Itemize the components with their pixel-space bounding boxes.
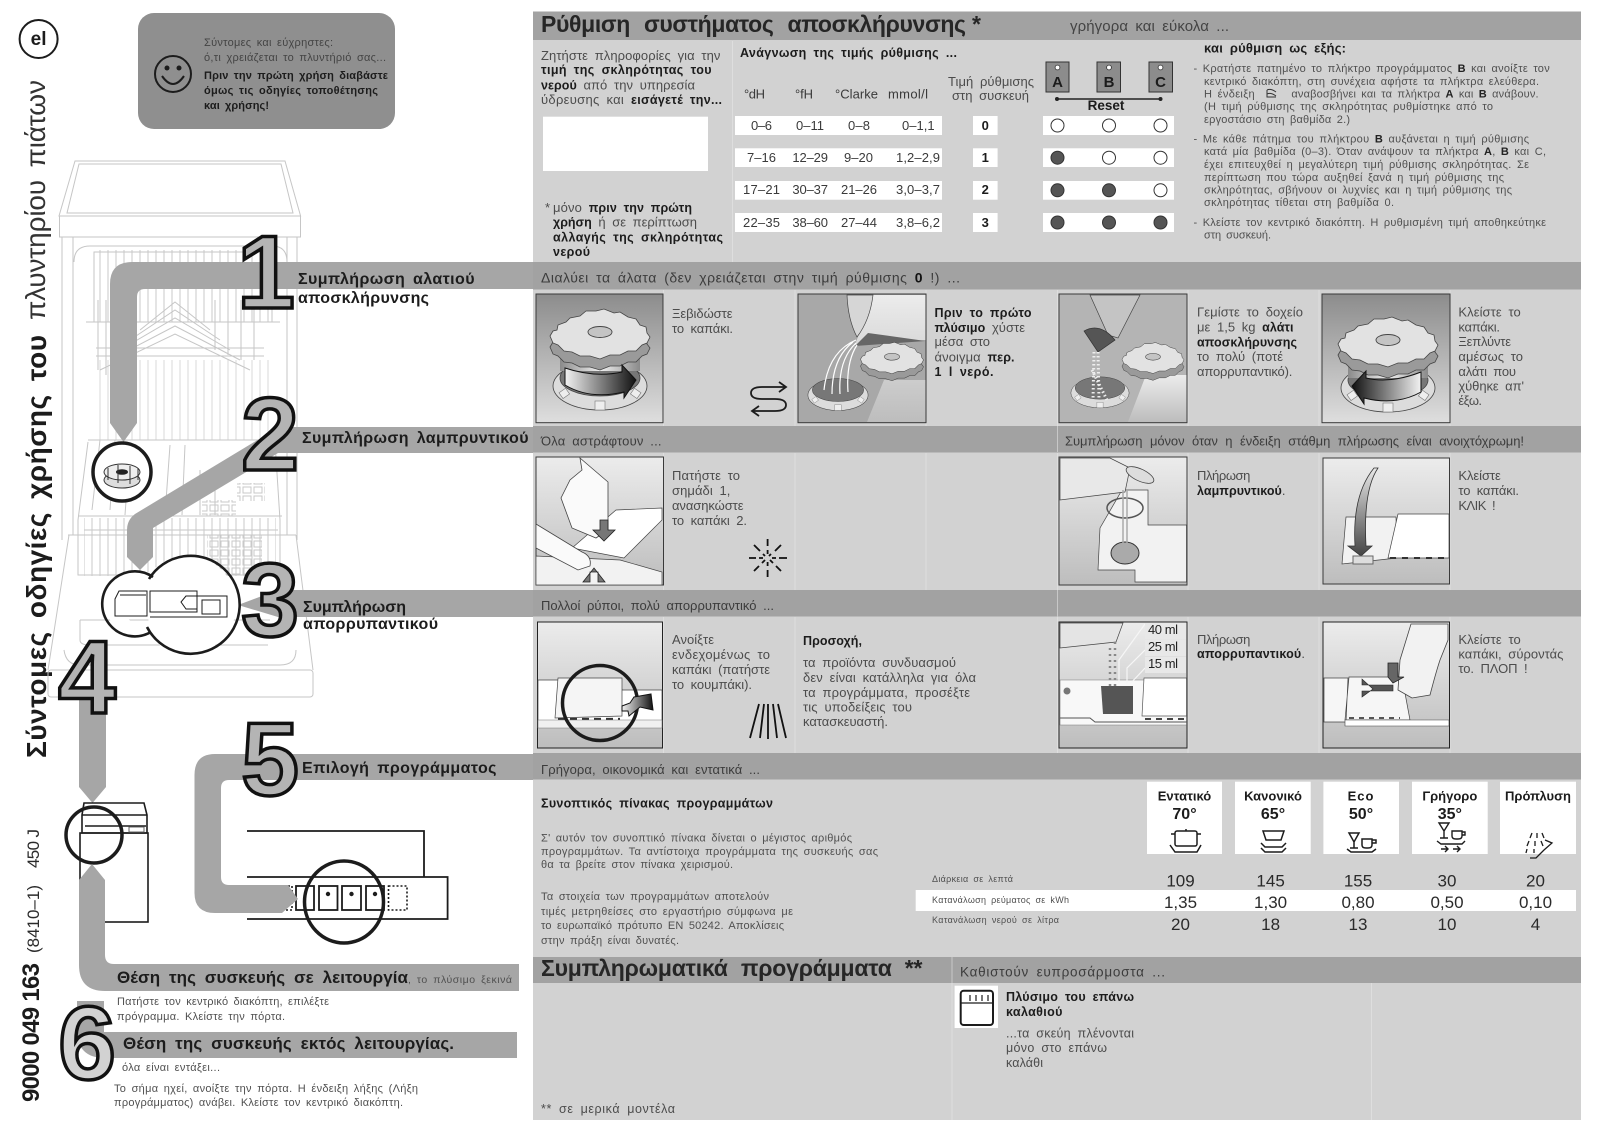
band text: rinse aid [540,434,1524,449]
document code: 450 J [24,829,43,868]
keys A B C: B [1104,74,1115,91]
number 6: 6 [58,986,116,1102]
icon: blinking symbol [1267,89,1276,97]
table: programme values [916,872,1576,934]
text: water hardness info: τιμή της σκληρότητας του [541,63,712,77]
heading: step 3: Συμπλήρωση [303,599,406,616]
image: pour rinse aid [1059,457,1187,585]
text: close cap: Κλείστε το [1458,305,1521,320]
table: hardness values: Ανάγνωση της τιμής ρύθμισης ... [740,46,957,60]
image: pour water [798,294,926,423]
text: setting instructions: - Με κάθε πάτημα του πλήκτρου B αυξάνεται η τιμή ρύθμισης [1194,134,1529,146]
text: pour water: μέσα στο [934,334,990,349]
text: pour rinse aid: Πλήρωση [1197,468,1250,483]
table header: Τιμή ρύθμισης [948,74,1034,89]
footnote: some models: ** σε μερικά μοντέλα [541,1102,675,1116]
card: quick 35: Γρήγορο [1422,789,1477,804]
heading: softening system: γρήγορα και εύκολα ... [1070,18,1229,35]
text: switch on: Πατήστε τον κεντρικό διακόπτη, επιλέξτε [117,996,329,1008]
table values: 27–44 [841,215,877,230]
callout text [204,37,389,112]
heading: softening system: * [972,11,981,37]
text: slide detergent lid [1458,632,1563,676]
text: close cap: καπάκι. [1458,320,1500,335]
text: programme overview: Τα στοιχεία των προγραμμάτων αποτελούν [541,891,770,903]
icon: pot [1170,829,1201,852]
dosage labels [1148,622,1178,671]
language badge: el [31,29,47,50]
row labels: Κατανάλωση ρεύματος σε kWh [932,895,1069,905]
table values: 0–6 [751,118,772,133]
table values: 9–20 [844,150,873,165]
table values [743,118,940,230]
table values: 0–11 [796,118,824,133]
card: intensive 70: Εντατικό [1158,789,1211,804]
document code: (8410–1) [24,885,43,953]
text: setting instructions: αναβοσβήνει και τα πλήκτρα A και B ανάβουν. [1291,88,1539,100]
text: open rinse aid lid: ανασηκώστε [672,498,744,513]
icon: spray over basket [1526,833,1552,858]
callout text: και χρήσης! [204,100,269,112]
table rows [735,116,1174,232]
text: close cap: αλάτι που [1458,364,1516,379]
table header: mmol/l [888,87,928,102]
text: close rinse aid: Κλείστε [1458,468,1501,483]
heading: switch off: Θέση της συσκευής εκτός λειτουργίας. [123,1034,454,1053]
table header: °fH [795,87,813,102]
text: unscrew cap [672,306,733,336]
arrow: step 2 [127,427,533,570]
text: close rinse aid: ΚΛΙΚ ! [1458,498,1496,513]
icon: rinse sparkle [749,539,787,577]
table values: 0–8 [848,118,870,133]
text: add salt [1197,305,1303,379]
footnote: first use: μόνο πριν την πρώτη [553,200,692,215]
text: setting instructions: - Κρατήστε πατημένο το πλήκτρο προγράμματος B και ανοίξτε τον [1194,63,1550,75]
arrow: step 6 band [77,1001,517,1058]
callout: read first [138,13,395,129]
heading: softening system: Ρύθμιση συστήματος αποσκλήρυνσης [541,11,966,37]
text: programme overview: το ευρωπαϊκό πρότυπο ΕΝ 50242. Αποκλίσεις [541,920,784,932]
keys A B C: A [1052,74,1063,91]
text: upper basket: ...τα σκεύη πλένονται [1006,1027,1134,1041]
text: unscrew cap: το καπάκι. [672,321,733,336]
values: 1,35 [1164,893,1197,912]
heading: softening system [541,11,1229,37]
band text: adaptable: Καθιστούν ευπροσάρμοστα ... [960,965,1165,980]
values: 0,10 [1519,893,1552,912]
card: intensive 70 [1147,782,1222,854]
number 4: 4 [58,620,116,736]
heading: switch on: Θέση της συσκευής σε λειτουργία [117,968,409,987]
values: 13 [1349,915,1367,934]
text: switch off: όλα είναι εντάξει... [122,1062,220,1074]
table header: στη συσκευή [952,88,1029,103]
table values: 22–35 [743,215,780,230]
card: eco 50: Eco [1348,789,1374,804]
text: switch on [117,996,329,1023]
values: 30 [1438,872,1456,891]
table values: 3,0–3,7 [896,182,940,197]
values: 20 [1526,872,1545,891]
dosage labels: 25 ml [1148,639,1178,654]
image: open detergent lid [538,622,662,748]
icon: glass and cup [1347,833,1376,852]
note: attention: Προσοχή, [803,634,862,648]
number 2: 2 [241,377,299,493]
text: open detergent lid [672,632,770,692]
note: attention: τα προϊόντα συνδυασμού [803,655,956,670]
setting values: 2 [982,182,989,197]
text: setting instructions: περίπτωση που τώρα αυξηθεί ξανά η τιμή ρύθμισης της [1204,172,1504,184]
text: fill detergent: απορρυπαντικού. [1197,646,1305,661]
setting values [982,118,989,230]
text: setting instructions: εργοστάσιο στη βαθμίδα 2.) [1204,114,1350,126]
table values: 0–1,1 [902,118,935,133]
values: 1,30 [1254,893,1287,912]
text: add salt: το πολύ (ποτέ [1197,349,1283,364]
card: eco 50 [1323,782,1399,854]
icon: smiley [155,56,191,92]
card: normal 65 [1235,782,1311,854]
document code [18,829,45,1102]
note: attention: δεν είναι κατάλληλα για όλα [803,670,976,685]
row labels [932,874,1069,925]
text: pour water [934,306,1032,379]
text: add salt: αποσκλήρυνσης [1197,336,1297,350]
text: programme overview: θα τα βρείτε στον πίνακα χειρισμού. [541,859,733,871]
heading: step 1 [298,271,474,307]
values: 0,50 [1430,893,1464,912]
footnote: first use: * [545,200,550,215]
text: upper basket [1006,990,1134,1070]
footnote: first use [545,200,723,259]
image: slide detergent lid [1323,622,1450,748]
text: switch off: προγράμματος) ανάβει. Κλείστε τον κεντρικό διακόπτη. [114,1097,403,1109]
arrow: step 4 lower band [79,864,519,991]
text: switch off: Το σήμα ηχεί, ανοίξτε την πόρτα. Η ένδειξη λήξης (Λήξη [114,1083,418,1095]
table values: 12–29 [792,150,828,165]
text: water hardness info: ύδρευσης και εισάγετέ την... [541,92,722,107]
callout text: Πριν την πρώτη χρήση διαβάστε [204,70,389,82]
text: open rinse aid lid: Πατήστε το [672,468,740,483]
table values: 7–16 [747,150,776,165]
text: switch on: πρόγραμμα. Κλείστε την πόρτα. [117,1011,285,1023]
image: add salt [1059,294,1187,423]
note: attention: τα προγράμματα, προσέξτε [803,685,970,700]
text: open rinse aid lid [672,468,747,528]
footnote: first use: χρήση ή σε περίπτωση [553,215,697,230]
table header: °dH [744,87,765,102]
text: close rinse aid [1458,468,1519,513]
heading: step 3 [303,599,438,633]
dosage labels: 40 ml [1148,622,1178,637]
text: pour water: πλύσιμο χύστε [934,320,1025,335]
keys A B C: C [1155,74,1166,91]
table values: 3,8–6,2 [896,215,940,230]
card: normal 65: 65° [1261,806,1285,823]
text: pour water: άνοιγμα περ. [934,349,1014,364]
icon: spray lines [750,704,786,739]
indicator lights [1051,119,1167,229]
card: intensive 70: 70° [1172,806,1197,823]
values: 10 [1438,915,1456,934]
vertical title: Σύντομες οδηγίες χρήσης του [21,335,52,758]
setting values: 3 [982,215,989,230]
setting values: 0 [982,118,989,133]
card: prewash [1500,782,1576,858]
table header [744,74,1034,103]
input box [543,117,708,171]
image: close cap [1322,294,1450,423]
heading: step 1: Συμπλήρωση αλατιού [298,271,474,288]
text: setting instructions: κατά μία βαθμίδα (0–3). Όταν ανάψουν τα πλήκτρα A, B και C, [1204,146,1546,158]
icon: dispenser detail circles [102,556,240,654]
icon: salt cap in circle [93,443,151,501]
heading: switch on: , το πλύσιμο ξεκινά [408,974,512,986]
text: setting instructions: και ρύθμιση ως εξής: [1204,41,1346,56]
callout text: ό,τι χρειάζεται το πλυντήριό σας... [204,52,386,64]
illustration: dishwasher [48,161,313,697]
text: upper basket: καλαθιού [1006,1005,1062,1019]
text: setting instructions: κεντρικό διακόπτη, στη συνέχεια αφήστε τα πλήκτρα ελεύθερα. [1204,76,1539,88]
text: water hardness info: Ζητήστε πληροφορίες για την [541,48,720,63]
number 5: 5 [241,702,299,818]
text: upper basket: Πλύσιμο του επάνω [1006,990,1134,1004]
text: close cap: έξω. [1458,393,1482,408]
text: open detergent lid: το κουμπάκι). [672,677,752,692]
text: slide detergent lid: Κλείστε το [1458,632,1521,647]
text: add salt: με 1,5 kg αλάτι [1197,320,1294,335]
row labels: Διάρκεια σε λεπτά [932,874,1013,884]
callout text: όμως τις οδηγίες τοποθέτησης [204,85,378,97]
text: close cap [1458,305,1524,408]
icon: quick dishes [1437,823,1465,852]
text: water hardness info [541,48,722,107]
text: close rinse aid: το καπάκι. [1458,483,1519,498]
band text: salt: Διαλύει τα άλατα (δεν χρειάζεται στην τιμή ρύθμισης 0 !) ... [541,270,960,286]
document code: 9000 049 163 [18,963,45,1102]
table values: 1,2–2,9 [896,150,940,165]
values: 155 [1344,872,1372,891]
arrow: step 5 [194,754,533,913]
text: unscrew cap: Ξεβιδώστε [672,306,733,321]
card: normal 65: Κανονικό [1244,789,1302,804]
text: open detergent lid: καπάκι (πατήστε [672,662,770,677]
text: setting instructions: στη συσκευή. [1204,230,1271,242]
text: setting instructions [1194,41,1550,242]
image: fill detergent [1059,622,1187,748]
text: open rinse aid lid: σημάδι 1, [672,483,730,498]
dosage labels: 15 ml [1148,656,1178,671]
heading: step 3: απορρυπαντικού [303,616,438,633]
band text: rinse aid: Όλα αστράφτουν ... [540,434,662,449]
table: hardness values [735,46,1174,232]
panel: right background [533,12,1581,1120]
text: setting instructions: σκληρότητας τίθεται στη βαθμίδα 0. [1204,197,1394,209]
table values: 21–26 [841,182,877,197]
heading: additional programmes: Συμπληρωματικά προγράμματα ** [541,955,923,981]
card: quick 35 [1412,782,1488,854]
text: setting instructions: έχει επιτευχθεί η μεγαλύτερη τιμή ρύθμισης σκληρότητας. Σε [1204,159,1529,171]
number 1: 1 [237,215,295,331]
text: pour rinse aid: λαμπρυντικού. [1197,483,1286,498]
text: close cap: χύθηκε απ' [1458,379,1524,394]
icon: alternate arrows [751,382,786,416]
illustration: control panel [247,831,448,943]
keys A B C [1046,62,1172,113]
text: pour rinse aid [1197,468,1286,498]
icon: upper basket [955,986,998,1028]
heading: step 5: Επιλογή προγράμματος [302,760,496,777]
values: 0,80 [1341,893,1375,912]
heading: step 2: Συμπλήρωση λαμπρυντικού [302,430,528,447]
values: 20 [1171,915,1190,934]
text: programme overview: Συνοπτικός πίνακας προγραμμάτων [541,796,773,810]
text: open rinse aid lid: το καπάκι 2. [672,513,747,528]
note: attention [803,634,976,729]
text: setting instructions: Η ένδειξη [1204,88,1255,100]
text: pour water: 1 l νερό. [934,365,994,379]
card: quick 35: 35° [1438,806,1462,823]
band text: detergent: Πολλοί ρύποι, πολύ απορρυπαντικό ... [541,598,774,613]
text: add salt: απορρυπαντικό). [1197,364,1292,379]
number 3: 3 [241,543,299,659]
text: close cap: αμέσως το [1458,349,1523,364]
vertical title [20,80,52,758]
image: close rinse aid [1323,458,1450,584]
values: 4 [1531,915,1540,934]
text: upper basket: καλάθι [1006,1056,1043,1070]
note: attention: κατασκευαστή. [803,714,888,729]
text: upper basket: μόνο στο επάνω [1006,1041,1107,1055]
table header: °Clarke [835,87,878,102]
text: programme overview: στην πράξη είναι δυνατές. [541,935,679,947]
arrow: step 3 [238,590,533,617]
footnote: first use: αλλαγής της σκληρότητας [553,231,723,245]
illustration: closed dishwasher [66,803,148,922]
language badge [20,20,58,58]
text: programme overview [541,796,878,947]
table values: 30–37 [792,182,828,197]
image: open rinse aid lid [536,457,664,585]
image: unscrew cap [536,294,663,423]
text: fill detergent: Πλήρωση [1197,632,1250,647]
band text: rinse aid: Συμπλήρωση μόνον όταν η ένδειξη στάθμη πλήρωσης είναι ανοιχτόχρωμη! [1065,434,1524,449]
band text: programmes: Γρήγορα, οικονομικά και εντατικά ... [541,762,760,777]
text: programme overview: προγραμμάτων. Τα αντίστοιχα προγράμματα της συσκευής σας [541,846,878,858]
vertical title: πλυντηρίου πιάτων [20,80,51,320]
values: 109 [1166,872,1195,891]
text: slide detergent lid: το. ΠΛΟΠ ! [1458,661,1528,676]
arrow: step 1 [110,262,533,442]
arrow: step 4 upper [79,700,106,803]
heading: step 1: αποσκλήρυνσης [298,290,429,307]
callout text: Σύντομες και εύχρηστες: [204,37,333,49]
text: programme overview: Σ' αυτόν τον συνοπτικό πίνακα δίνεται ο μέγιστος αριθμός [541,833,852,845]
text: fill detergent [1197,632,1305,661]
card: eco 50: 50° [1349,806,1373,823]
text: open detergent lid: Ανοίξτε [672,632,714,647]
values: 18 [1261,915,1280,934]
icon: dishes [1261,831,1286,852]
values: 145 [1256,872,1285,891]
table values: 17–21 [743,182,780,197]
footnote: first use: νερού [553,245,590,259]
text: open detergent lid: ενδεχομένως το [672,647,770,662]
text: setting instructions: σκληρότητας, σβήνουν οι λυχνίες και η τιμή ρύθμισης της [1204,185,1512,197]
text: add salt: Γεμίστε το δοχείο [1197,305,1303,320]
card: prewash: Πρόπλυση [1505,789,1571,804]
values [1164,872,1552,934]
table values: 38–60 [792,215,828,230]
text: close cap: Ξεπλύντε [1458,334,1511,349]
text: slide detergent lid: καπάκι, σύροντάς [1458,646,1563,662]
text: setting instructions: - Κλείστε τον κεντρικό διακόπτη. Η ρυθμισμένη τιμή αποθηκεύτηκε [1194,217,1546,229]
text: programme overview: τιμές μετρηθείσες στο εργαστήριο σύμφωνα με [541,906,793,918]
text: switch off [114,1062,418,1109]
keys A B C: Reset [1088,98,1125,113]
setting values: 1 [982,150,989,165]
text: pour water: Πριν το πρώτο [934,306,1032,320]
text: setting instructions: (Η τιμή ρύθμισης της σκληρότητας ρυθμίστηκε από το [1204,101,1493,113]
text: water hardness info: νερού από την υπηρεσία [541,77,695,92]
note: attention: τις υποδείξεις του [803,700,912,715]
row labels: Κατανάλωση νερού σε λίτρα [932,915,1059,925]
